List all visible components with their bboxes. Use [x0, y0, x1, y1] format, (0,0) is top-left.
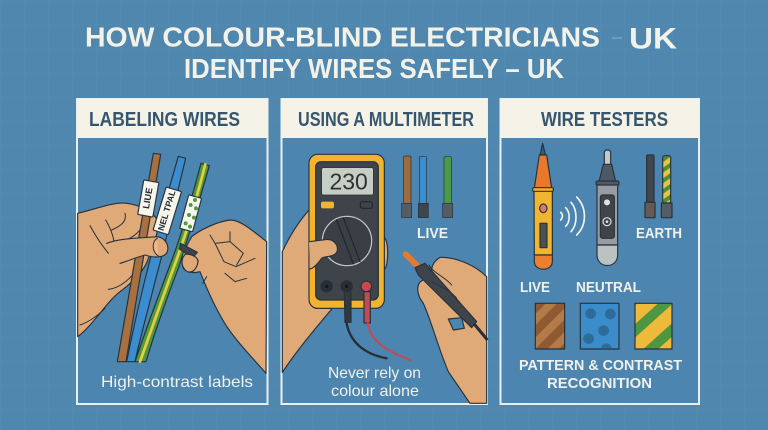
panel: using a multimeter: [282, 99, 487, 404]
title: [85, 22, 677, 84]
title: IDENTIFY WIRES SAFELY – UK: [184, 53, 564, 84]
illustration: testers, wires and pattern swatches: [533, 143, 672, 349]
illustration: hands labeling wires: LIUE: [141, 187, 155, 210]
label: neutral: NEUTRAL: [576, 279, 641, 296]
caption: never rely on colour alone: [328, 365, 421, 400]
illustration: hands labeling wires: [78, 153, 267, 373]
panel: labeling wires: [77, 99, 268, 404]
label: live: LIVE: [417, 225, 448, 242]
caption: never rely on colour alone: colour alone: [331, 383, 419, 400]
label: earth: EARTH: [636, 225, 682, 242]
illustration: hands labeling wires: NEL TPAL: [156, 188, 178, 232]
caption: never rely on colour alone: Never rely on: [328, 365, 421, 382]
title: UK: [629, 22, 677, 56]
heading: using a multimeter: USING A MULTIMETER: [298, 109, 474, 131]
heading: wire testers: WIRE TESTERS: [541, 109, 668, 131]
illustration: multimeter in hand: 230: [329, 169, 368, 195]
caption: pattern and contrast recognition: [519, 357, 682, 392]
illustration: multimeter in hand: [282, 154, 487, 403]
title: HOW COLOUR-BLIND ELECTRICIANS: [85, 22, 600, 52]
caption: pattern and contrast recognition: RECOGNITION: [547, 375, 652, 392]
caption: pattern and contrast recognition: PATTERN & CONTRAST: [519, 357, 682, 374]
heading: labeling wires: LABELING WIRES: [89, 109, 240, 131]
panel: wire testers: [500, 99, 699, 404]
label: live tester: LIVE: [520, 279, 550, 296]
caption: high-contrast labels: High-contrast labels: [101, 374, 253, 391]
